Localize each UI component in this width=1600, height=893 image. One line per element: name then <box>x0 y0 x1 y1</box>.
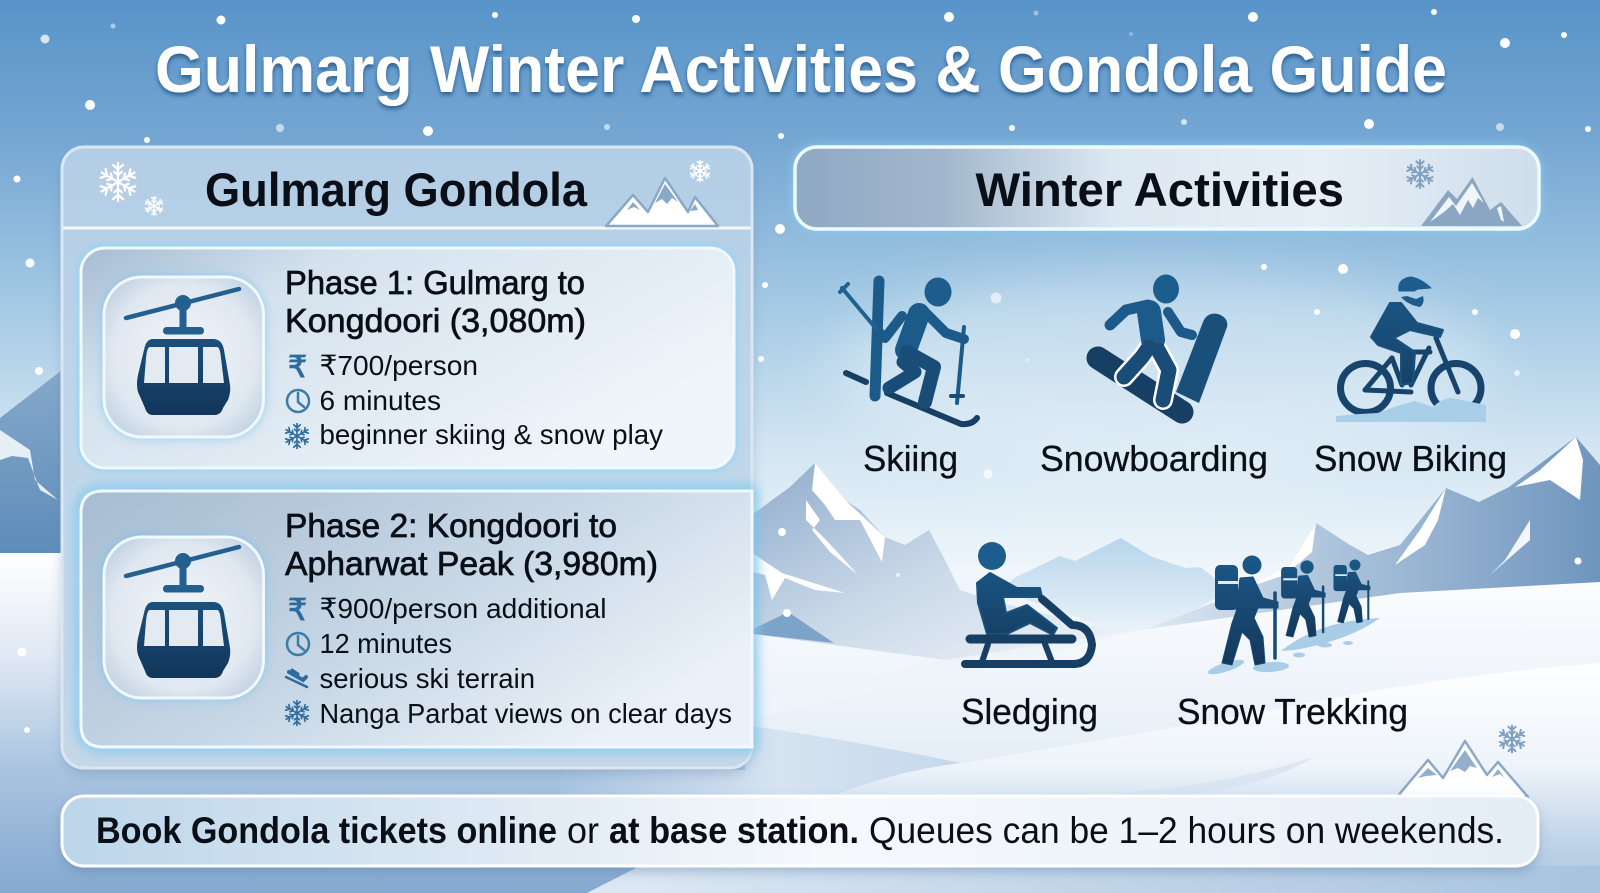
text: Phase 2 heading <box>285 507 658 582</box>
label: Snowboarding: Snowboarding <box>1040 438 1268 479</box>
label: Sledging: Sledging <box>961 691 1098 732</box>
text: price: ₹700/person <box>320 350 478 381</box>
label: Skiing: Skiing <box>863 438 958 479</box>
text: Phase 1 heading <box>285 264 586 339</box>
icon: sled <box>965 542 1092 664</box>
activity: Snow Biking <box>1314 277 1507 479</box>
icon: snowflake <box>1406 160 1434 188</box>
activity: Sledging <box>961 542 1098 732</box>
text: terrain: serious ski terrain <box>320 663 535 694</box>
panel: Winter Activities header <box>795 147 1539 229</box>
heading: Winter Activities: Winter Activities <box>976 163 1344 216</box>
icon: snowboarder <box>1098 274 1227 412</box>
heading: Gulmarg Gondola: Gulmarg Gondola <box>205 163 588 216</box>
callout: booking note: at base station. <box>609 810 859 851</box>
activity: Snowboarding <box>1040 274 1268 479</box>
label: Snow Biking: Snow Biking <box>1314 438 1507 479</box>
card: Phase 2 <box>81 491 752 747</box>
callout: booking note <box>62 796 1538 871</box>
label: Snow Trekking: Snow Trekking <box>1177 691 1408 732</box>
text: Phase 2 heading: Phase 2: Kongdoori to <box>285 507 617 544</box>
text: duration: 6 minutes <box>320 385 441 416</box>
text: Phase 2 heading: Apharwat Peak (3,980m) <box>285 545 658 582</box>
falling snow dots <box>14 9 1591 733</box>
text: Phase 1 heading: Phase 1: Gulmarg to <box>285 264 585 301</box>
icon: biker <box>1336 277 1486 422</box>
icon: clock <box>287 390 309 412</box>
icon: clock <box>287 633 309 655</box>
title: Gulmarg Winter Activities & Gondola Guide <box>155 32 1447 106</box>
icon: snowflake <box>285 424 309 448</box>
icon: snowflake <box>285 700 309 726</box>
icon: gondola tile 2 <box>104 537 264 698</box>
text: use: beginner skiing & snow play <box>320 419 663 450</box>
icon: mountain <box>1421 177 1522 226</box>
icon: skier <box>840 278 977 424</box>
callout: booking note: or <box>567 810 599 851</box>
text: Phase 1 heading: Kongdoori (3,080m) <box>285 302 586 339</box>
card: Phase 1 <box>81 248 734 468</box>
callout: booking note: Book Gondola tickets online <box>96 810 557 851</box>
panel: Gulmarg Gondola <box>62 147 752 774</box>
text: price: ₹900/person additional <box>320 593 606 624</box>
icon: header snowflakes <box>99 160 710 216</box>
icon: footer mountains and snowflake <box>1397 726 1528 797</box>
icon: gondola tile 1 <box>104 277 264 437</box>
activity: Skiing <box>840 278 977 479</box>
text: duration: 12 minutes <box>320 628 452 659</box>
icon: trekkers <box>1207 556 1380 677</box>
icon: rupee: ₹ <box>288 351 307 384</box>
icon: rupee: ₹ <box>288 594 307 627</box>
callout: booking note: Queues can be 1–2 hours on weekends. <box>869 810 1504 851</box>
activity: Snow Trekking <box>1177 556 1408 732</box>
icon: ski <box>286 670 307 687</box>
text: views: Nanga Parbat views on clear days <box>320 698 732 729</box>
icon: header mountains <box>606 178 718 226</box>
